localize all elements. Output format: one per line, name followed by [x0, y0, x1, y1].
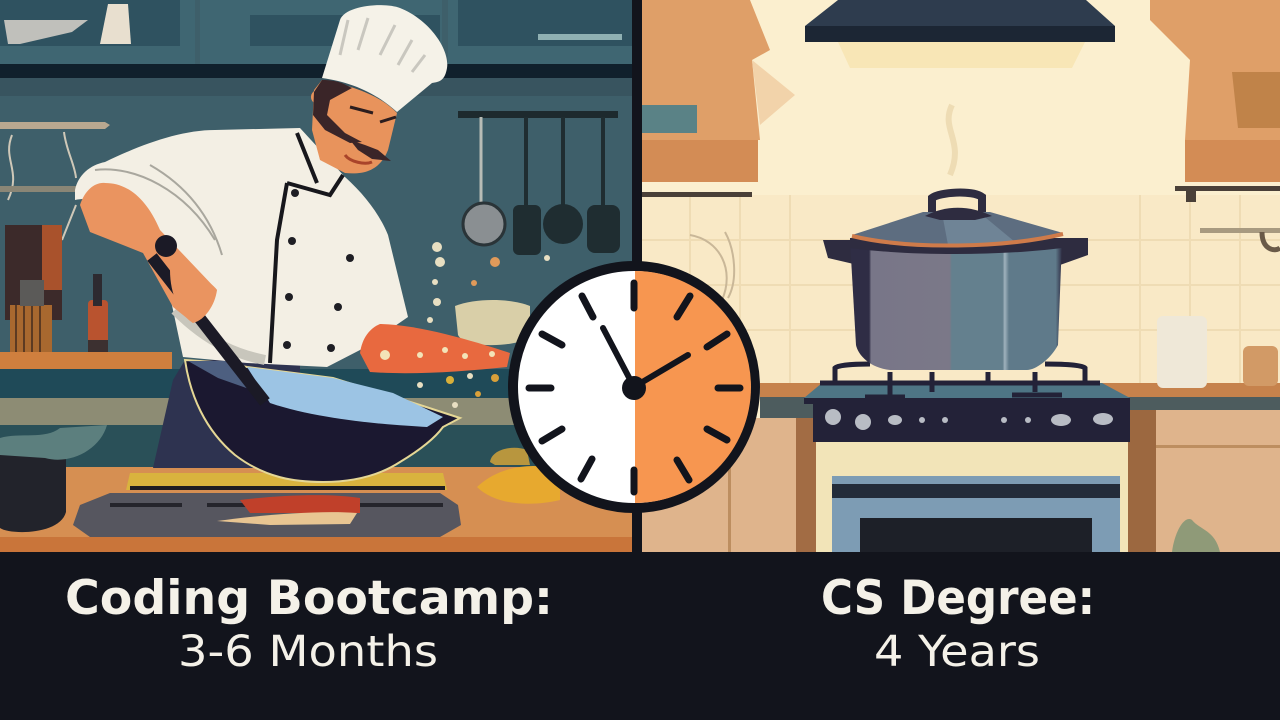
left wall shelf — [0, 122, 110, 320]
caption: coding bootcamp: Coding Bootcamp: — [65, 571, 553, 626]
right forearm — [360, 324, 510, 373]
caption: coding bootcamp — [65, 571, 553, 677]
cutting counter — [0, 448, 632, 552]
steam wisp — [949, 105, 955, 175]
caption band — [0, 552, 1280, 720]
caption: cs degree: CS Degree: — [821, 571, 1095, 626]
panel: slow pot kitchen — [642, 0, 1280, 552]
tile wall — [642, 195, 1280, 385]
caption: cs degree — [821, 571, 1095, 677]
hanging utensils — [458, 111, 620, 255]
wok handle — [152, 257, 265, 402]
caption: cs degree: 4 Years — [874, 627, 1040, 677]
stove — [804, 364, 1130, 552]
lower wood cabinets — [642, 410, 1280, 552]
toque hat — [322, 5, 447, 112]
wall rails — [642, 186, 1280, 250]
panel: fast chef kitchen — [0, 0, 632, 552]
icon: split clock — [513, 266, 755, 508]
center divider — [632, 0, 642, 720]
coat placket — [270, 133, 343, 363]
range hood — [805, 0, 1115, 68]
bowl by stove — [455, 300, 530, 345]
upper cabinets — [0, 0, 632, 78]
mustache — [350, 140, 391, 161]
clock hands — [603, 328, 688, 387]
face — [312, 80, 397, 173]
chef — [75, 5, 510, 468]
small black pot — [0, 425, 107, 532]
countertop — [760, 383, 1280, 418]
spice sparks — [417, 242, 550, 408]
cooking pot — [823, 193, 1088, 370]
wok — [152, 235, 460, 482]
hand — [170, 270, 217, 323]
burner grate — [820, 364, 1100, 397]
spice box and bottle — [10, 274, 108, 357]
left forearm — [80, 183, 217, 323]
hair and beard — [313, 80, 362, 143]
left wood cabinet — [642, 0, 795, 182]
coat — [75, 128, 408, 367]
right wood cabinet — [1150, 0, 1280, 182]
counter shelves — [0, 352, 632, 468]
apron — [153, 360, 300, 468]
caption: coding bootcamp: 3-6 Months — [178, 627, 438, 677]
canister and jar — [1157, 316, 1278, 388]
